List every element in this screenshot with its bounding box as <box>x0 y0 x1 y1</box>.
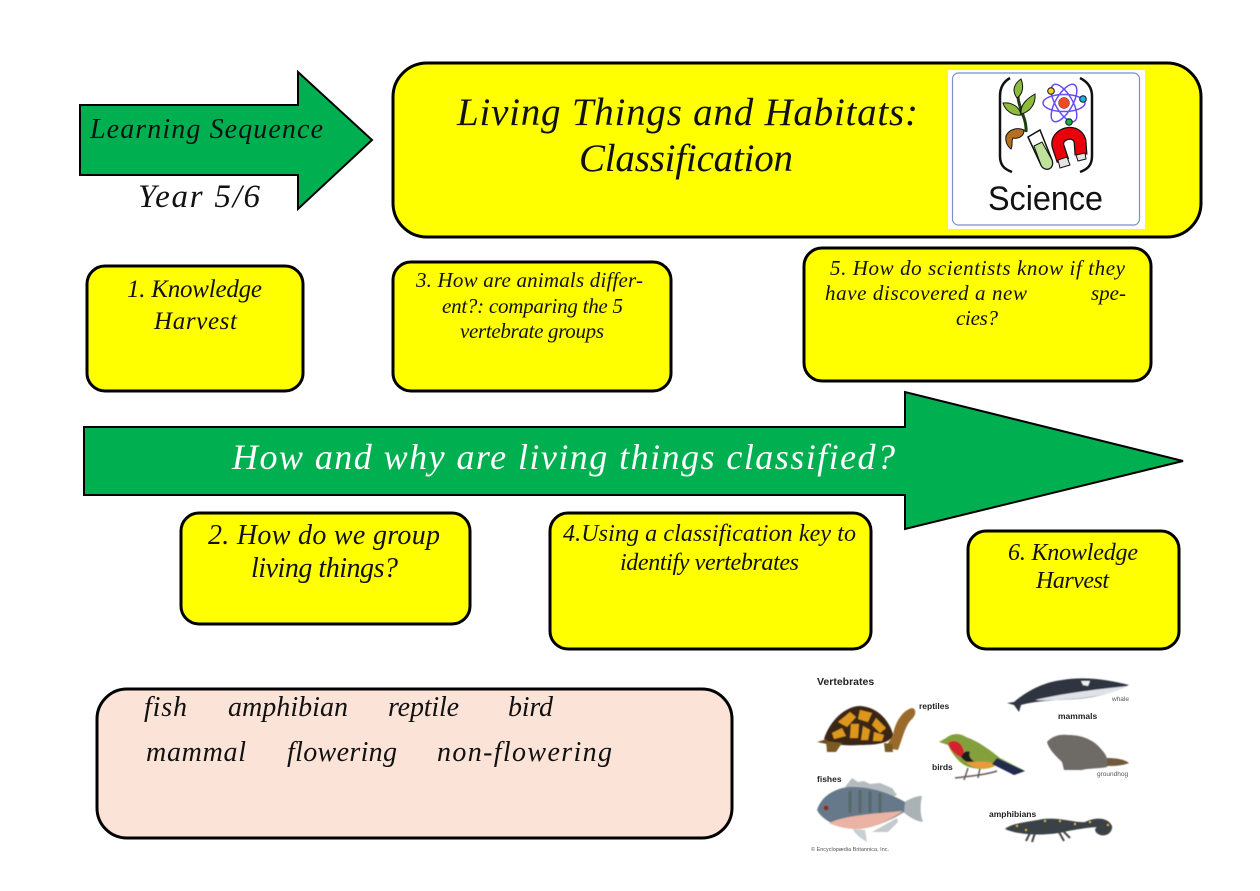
icon: turtle <box>817 706 915 752</box>
box: lesson 1: 1. Knowledge <box>127 276 262 303</box>
box: lesson 4: 4.Using a classification key to <box>563 521 856 547</box>
arrow: learning sequence <box>80 72 372 209</box>
panel: vocabulary: amphibian <box>228 692 348 723</box>
box: lesson 1: Harvest <box>153 308 238 335</box>
box: lesson 2 <box>181 513 470 624</box>
box: lesson 3: vertebrate groups <box>460 319 604 343</box>
panel: vocabulary: reptile <box>388 692 459 723</box>
box: lesson 3 <box>393 262 671 391</box>
illustration: vertebrates: Vertebrates <box>817 676 874 688</box>
illustration: vertebrates <box>811 676 1129 853</box>
arrow: central question <box>84 392 1183 529</box>
arrow: central question: How and why are living things classified? <box>231 437 895 477</box>
box: lesson 3: 3. How are animals differ- <box>415 268 643 292</box>
icon: science logo: Science <box>988 180 1103 218</box>
illustration: vertebrates: birds <box>932 762 953 772</box>
title panel: Living Things and Habitats: <box>456 91 918 134</box>
icon: salamander <box>1005 819 1112 842</box>
box: lesson 2: 2. How do we group <box>208 520 440 551</box>
box: lesson 6: Harvest <box>1035 568 1110 594</box>
box: lesson 4: identify vertebrates <box>620 550 799 576</box>
box: lesson 5 <box>804 248 1151 381</box>
box: lesson 4 <box>550 513 871 649</box>
illustration: vertebrates: reptiles <box>919 701 950 711</box>
box: lesson 3: ent?: comparing the 5 <box>442 294 623 318</box>
panel: vocabulary: flowering <box>287 737 397 768</box>
year label: Year 5/6 <box>138 179 260 215</box>
illustration: vertebrates: mammals <box>1058 711 1097 721</box>
panel: vocabulary: bird <box>508 692 554 723</box>
illustration: vertebrates: whale <box>1111 696 1129 703</box>
illustration: vertebrates: fishes <box>817 774 842 784</box>
box: lesson 6 <box>968 531 1179 649</box>
box: lesson 6: 6. Knowledge <box>1008 540 1138 566</box>
box: lesson 5: spe- <box>1091 281 1126 305</box>
arrow: learning sequence: Learning Sequence <box>89 114 323 145</box>
icon: bird <box>939 734 1025 780</box>
box: lesson 5: have discovered a new <box>825 281 1027 305</box>
icon: science logo <box>948 70 1145 229</box>
icon: whale <box>1007 678 1129 712</box>
illustration: vertebrates: © Encyclopædia Britannica, Inc. <box>811 846 890 853</box>
box: lesson 2: living things? <box>251 553 398 584</box>
icon: groundhog <box>1047 735 1129 770</box>
box: lesson 1 <box>87 266 303 391</box>
panel: vocabulary: fish <box>144 692 187 723</box>
box: lesson 5: cies? <box>956 306 998 330</box>
panel: vocabulary <box>97 689 732 838</box>
illustration: vertebrates: amphibians <box>989 809 1037 819</box>
title panel <box>393 63 1201 237</box>
illustration: vertebrates: groundhog <box>1097 771 1128 778</box>
title panel: Classification <box>579 137 793 180</box>
box: lesson 5: 5. How do scientists know if they <box>830 256 1126 280</box>
icon: fish <box>817 778 923 842</box>
panel: vocabulary: mammal <box>146 737 246 768</box>
panel: vocabulary: non-flowering <box>437 737 612 768</box>
